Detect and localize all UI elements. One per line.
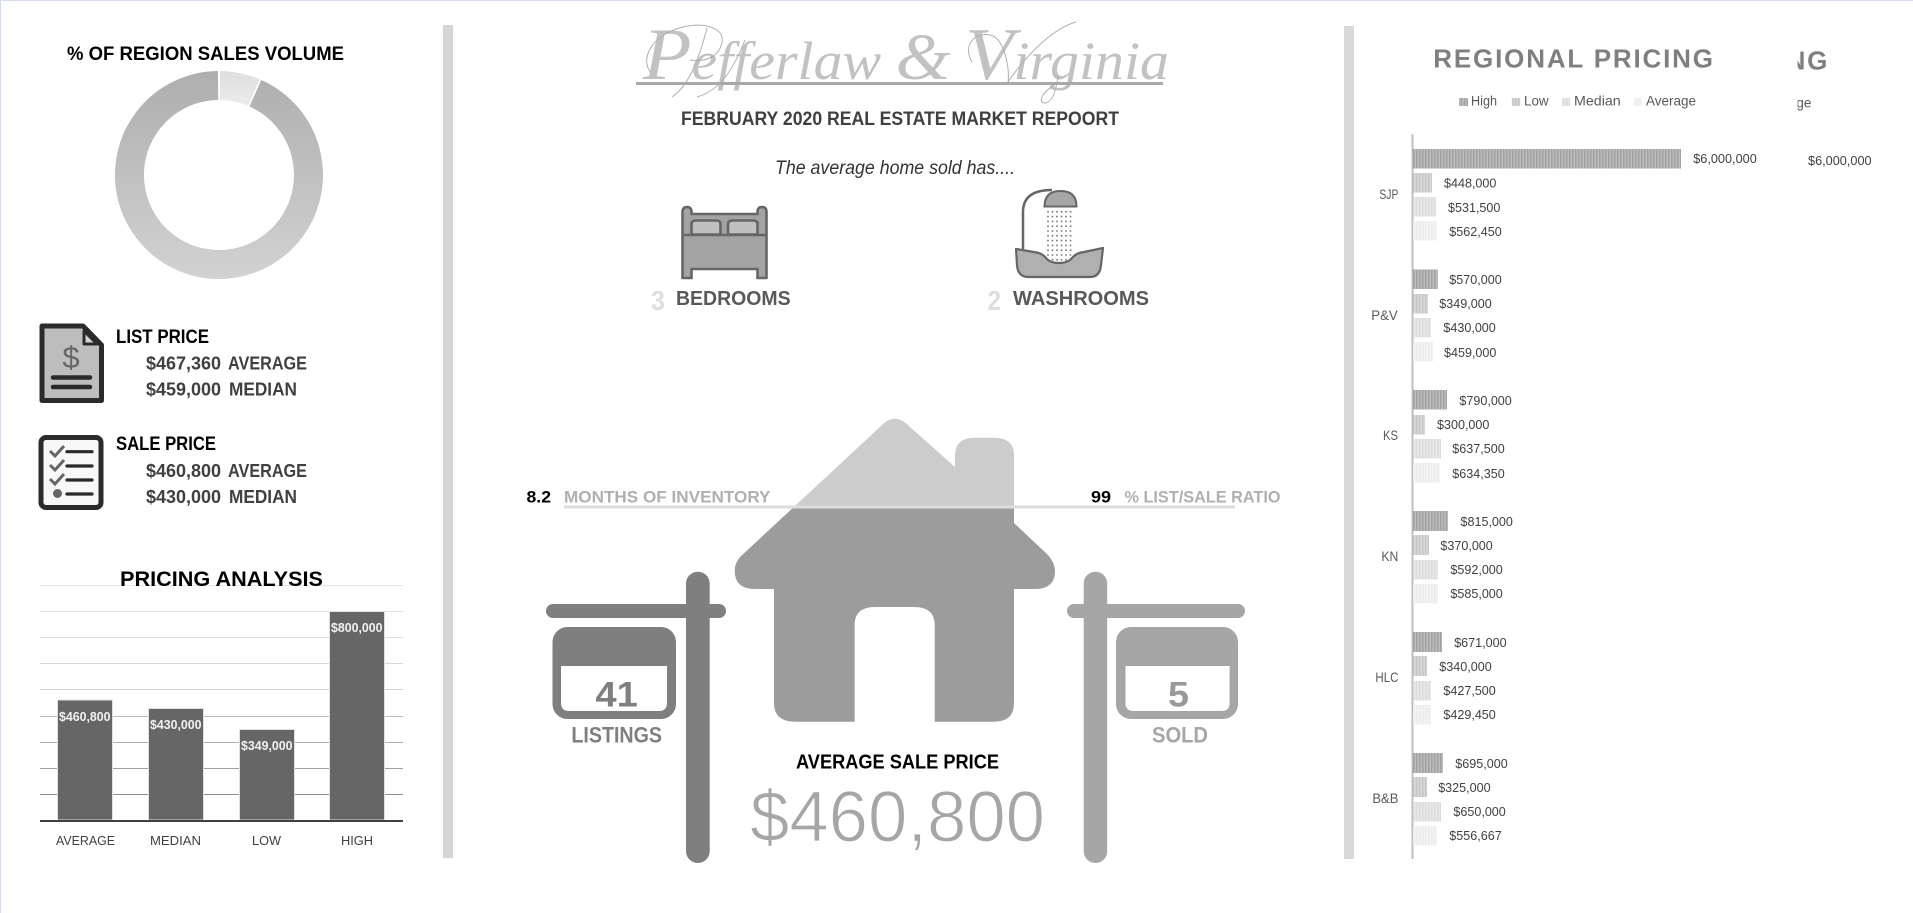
title: Pefferlaw & Virginia (642, 14, 1169, 96)
metric: list/sale ratio: 99 (1091, 488, 1111, 507)
text block: list price: MEDIAN (229, 379, 297, 400)
metric: list/sale ratio: % LIST/SALE RATIO (1124, 488, 1280, 507)
category labels: HIGH (341, 833, 373, 848)
region: KS: $790,000 (1459, 393, 1512, 408)
region: SJP: $6,000,000 (1693, 151, 1757, 166)
text: bedrooms: 3 (651, 285, 665, 316)
region: P&V: P&V (1371, 308, 1398, 323)
region: P&V: $570,000 (1449, 272, 1502, 287)
average sale price: $460,800 (750, 778, 1045, 858)
region: P&V: $459,000 (1444, 345, 1496, 360)
average sale price: AVERAGE SALE PRICE (796, 752, 999, 774)
clipped duplicate heading (1798, 51, 1826, 110)
region: B&B: $650,000 (1453, 804, 1506, 819)
text block: list price: $467,360 (146, 352, 221, 374)
bar chart: pricing analysis (40, 567, 403, 848)
category labels (56, 833, 373, 848)
clipped duplicate heading: Average (1761, 96, 1811, 111)
bar value labels: $430,000 (150, 718, 202, 732)
text: washrooms (988, 285, 1149, 316)
left divider (443, 25, 453, 858)
text block: sale price: $430,000 (146, 486, 221, 507)
heading: region sales volume: % OF REGION SALES VOLUME (67, 43, 344, 65)
region: SJP: $448,000 (1444, 176, 1496, 190)
region: KS: $637,500 (1452, 441, 1505, 456)
listings sign: LISTINGS (571, 722, 662, 747)
region: B&B: $695,000 (1455, 756, 1508, 771)
bar value labels (59, 621, 383, 753)
icon: list price document: $ (62, 340, 80, 375)
text block: sale price (116, 433, 307, 507)
region: P&V: $430,000 (1443, 320, 1496, 335)
region: KN (1381, 511, 1513, 604)
icon: list price document (42, 326, 102, 400)
text: washrooms: 2 (988, 285, 1001, 316)
right divider (1344, 26, 1354, 859)
text: bedrooms: BEDROOMS (676, 288, 791, 310)
region: HLC: HLC (1375, 670, 1399, 685)
region: KN: $592,000 (1450, 562, 1503, 577)
text block: list price: $459,000 (146, 379, 221, 400)
region: KS: KS (1383, 428, 1398, 443)
clipped duplicate heading: REGIONAL PRICING (1548, 45, 1827, 75)
subtitle: FEBRUARY 2020 REAL ESTATE MARKET REPOORT (681, 108, 1119, 130)
text: washrooms: WASHROOMS (1013, 288, 1149, 310)
legend: Average (1646, 93, 1696, 108)
second value label clipped copy: $6,000,000 (1808, 153, 1872, 168)
text block: sale price: SALE PRICE (116, 433, 216, 455)
region: P&V (1371, 270, 1502, 362)
listings sign (546, 572, 726, 863)
bar value labels: $460,800 (59, 710, 111, 724)
legend: Low (1524, 93, 1549, 108)
icon: shower and tub (1016, 190, 1103, 277)
region: HLC: $427,500 (1443, 683, 1496, 698)
category labels: LOW (252, 833, 282, 848)
panel: left column (40, 43, 403, 848)
panel: centre column (526, 14, 1280, 863)
panel: regional pricing chart (1371, 44, 1872, 859)
metric line (564, 506, 1235, 508)
text block: list price: LIST PRICE (116, 326, 209, 348)
text: bedrooms (651, 285, 791, 316)
region: B&B (1372, 753, 1508, 846)
region: SJP: SJP (1379, 187, 1398, 202)
region: KS: $634,350 (1452, 466, 1505, 481)
region: KN: KN (1381, 549, 1398, 564)
text block: list price (116, 326, 307, 400)
legend: Median (1574, 93, 1621, 108)
region: P&V: $349,000 (1439, 296, 1492, 311)
heading: pricing analysis: PRICING ANALYSIS (120, 567, 323, 591)
region: KN: $585,000 (1450, 586, 1503, 601)
sold sign (1067, 572, 1245, 863)
region: B&B: $325,000 (1438, 780, 1491, 795)
listings sign: 41 (595, 676, 638, 715)
region: HLC: $671,000 (1454, 635, 1507, 650)
bar value labels: $349,000 (241, 739, 293, 753)
category labels: AVERAGE (56, 833, 115, 848)
text block: sale price: MEDIAN (229, 486, 297, 507)
region: B&B: $556,667 (1449, 828, 1502, 843)
region: SJP: $531,500 (1448, 200, 1500, 215)
sold sign: 5 (1168, 676, 1189, 715)
region: HLC: $340,000 (1439, 659, 1492, 674)
metric: months of inventory: MONTHS OF INVENTORY (564, 488, 771, 507)
text block: sale price: $460,800 (146, 460, 221, 481)
region: SJP: $562,450 (1449, 224, 1502, 239)
icon: house (735, 419, 1055, 722)
region: KN: $815,000 (1460, 514, 1513, 529)
icon: sale price checklist (41, 438, 101, 508)
category labels: MEDIAN (150, 833, 201, 848)
region: HLC: $429,450 (1443, 707, 1496, 722)
text: average home intro: The average home sold has.... (775, 158, 1015, 179)
text block: list price: AVERAGE (228, 352, 307, 374)
bar value labels: $800,000 (331, 621, 383, 635)
region: SJP (1379, 149, 1757, 240)
metric: months of inventory: 8.2 (526, 488, 551, 507)
sold sign: SOLD (1152, 722, 1208, 747)
text block: sale price: AVERAGE (228, 460, 307, 481)
chart axis (1412, 134, 1414, 859)
region: HLC (1375, 632, 1507, 724)
heading: regional pricing: REGIONAL PRICING (1433, 44, 1713, 74)
region: B&B: B&B (1372, 791, 1398, 806)
bars (58, 612, 384, 820)
donut chart (129, 86, 308, 264)
region: KS: $300,000 (1437, 417, 1489, 432)
legend (1459, 93, 1696, 108)
legend: High (1471, 93, 1497, 108)
icon: bed (682, 207, 766, 278)
region: KN: $370,000 (1440, 538, 1493, 553)
region: KS (1383, 390, 1512, 482)
